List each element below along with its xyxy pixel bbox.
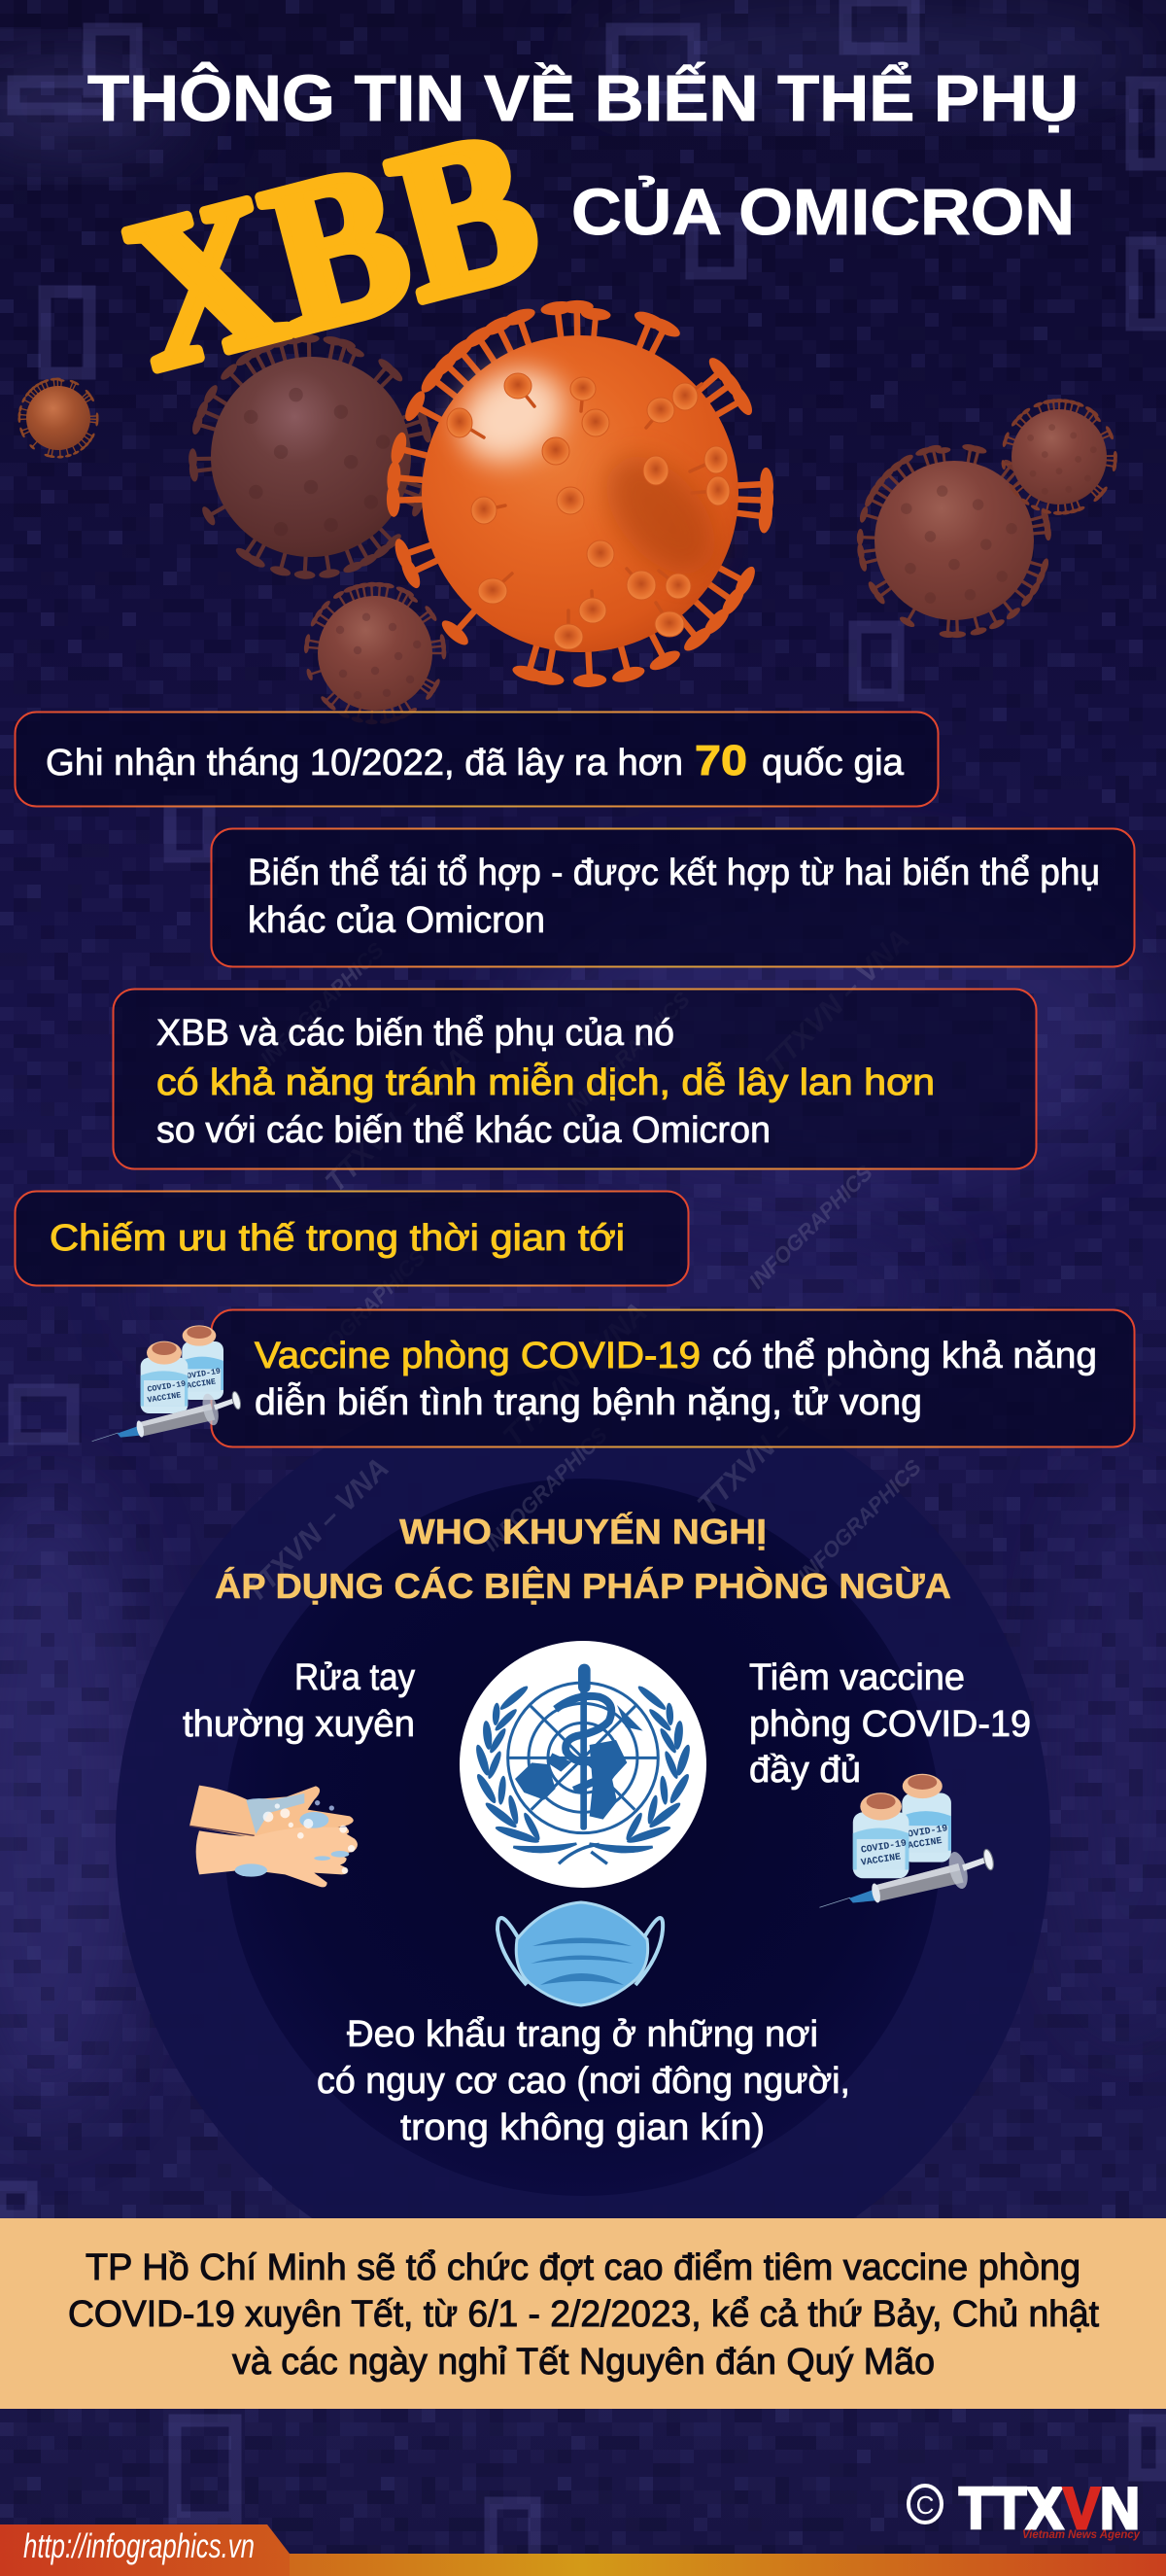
number 70: 70 bbox=[695, 737, 747, 784]
panel: recorded spread: quốc gia bbox=[762, 743, 905, 783]
panel: recombinant variant: Biến thể tái tổ hợp - được kết hợp từ hai biến thể phụ bbox=[248, 853, 1100, 893]
panel: vaccine protection: có thể phòng khả năng bbox=[712, 1336, 1097, 1376]
panel: immune evasion: có khả năng tránh miễn dịch, dễ lây lan hơn bbox=[156, 1062, 935, 1103]
panel: vaccine protection bbox=[212, 1310, 1135, 1446]
title line 1: THÔNG TIN VỀ BIẾN THỂ PHỤ bbox=[87, 62, 1079, 135]
icon: vaccine vials and syringe bbox=[92, 1325, 242, 1442]
icon: vaccine vials and syringe (large) bbox=[819, 1774, 995, 1907]
logo: TTXVN: Vietnam News Agency bbox=[1022, 2527, 1141, 2541]
virus: bottom bbox=[277, 556, 472, 750]
panel: recombinant variant: khác của Omicron bbox=[248, 900, 545, 941]
text: wear a mask: có nguy cơ cao (nơi đông người, bbox=[317, 2061, 850, 2102]
virus: large dim left bbox=[156, 302, 465, 611]
WHO heading: ÁP DỤNG CÁC BIỆN PHÁP PHÒNG NGỪA bbox=[215, 1565, 951, 1606]
watermarks: INFOGRAPHICS bbox=[297, 1244, 430, 1378]
logo: TTXVN: TTXVN bbox=[959, 2476, 1140, 2541]
text: get vaccinated: đầy đủ bbox=[749, 1750, 861, 1791]
panel: vaccine protection: diễn biến tình trạng bệnh nặng, tử vong bbox=[255, 1381, 922, 1423]
icon: face mask bbox=[497, 1902, 663, 2005]
watermarks: TTXVN – VNA bbox=[497, 1297, 654, 1453]
watermarks: INFOGRAPHICS bbox=[479, 1422, 612, 1556]
big concentric circle backdrop bbox=[116, 1370, 1050, 2305]
watermarks bbox=[239, 923, 926, 1609]
watermarks: INFOGRAPHICS bbox=[256, 937, 389, 1071]
icon: washing hands bbox=[189, 1786, 358, 1887]
text: wash hands: thường xuyên bbox=[183, 1704, 415, 1745]
panel: dominant soon: Chiếm ưu thế trong thời gian tới bbox=[50, 1218, 625, 1259]
footer strip bbox=[0, 2554, 1166, 2576]
banner: Ho Chi Minh City campaign: TP Hồ Chí Minh sẽ tổ chức đợt cao điểm tiêm vaccine phòng bbox=[86, 2247, 1080, 2288]
logo: TTXVN: C bbox=[916, 2490, 934, 2520]
watermarks: TTXVN – VNA bbox=[692, 1365, 848, 1521]
watermarks: TTXVN – VNA bbox=[320, 1042, 476, 1199]
banner: Ho Chi Minh City campaign: và các ngày nghỉ Tết Nguyên đán Quý Mão bbox=[232, 2342, 935, 2383]
watermarks: INFOGRAPHICS bbox=[562, 987, 695, 1121]
panel: immune evasion: XBB và các biến thể phụ của nó bbox=[156, 1013, 674, 1054]
watermarks: INFOGRAPHICS bbox=[744, 1160, 877, 1294]
text: wash hands bbox=[183, 1657, 415, 1745]
text: wear a mask: Đeo khẩu trang ở những nơi bbox=[347, 2014, 818, 2055]
panel: dominant soon bbox=[16, 1192, 688, 1285]
watermarks: TTXVN – VNA bbox=[760, 923, 916, 1080]
footer tab with url: http://infographics.vn bbox=[23, 2527, 255, 2565]
virus: main orange bbox=[386, 299, 774, 688]
text: wear a mask: trong không gian kín) bbox=[400, 2107, 765, 2148]
WHO heading bbox=[215, 1512, 951, 1606]
WHO heading: WHO KHUYẾN NGHỊ bbox=[399, 1512, 767, 1551]
panel: recorded spread: Ghi nhận tháng 10/2022, đã lây ra hơn bbox=[46, 743, 683, 783]
icon: WHO emblem bbox=[460, 1641, 706, 1888]
banner: Ho Chi Minh City campaign bbox=[0, 2218, 1166, 2409]
virus: right small bbox=[977, 374, 1142, 540]
panel: vaccine protection: Vaccine phòng COVID-19 bbox=[255, 1336, 701, 1376]
panel: recombinant variant bbox=[212, 828, 1135, 966]
panel: immune evasion bbox=[113, 990, 1036, 1168]
title line 2: CỦA OMICRON bbox=[571, 176, 1075, 249]
text: get vaccinated: Tiêm vaccine bbox=[749, 1657, 965, 1698]
virus: right large bbox=[839, 425, 1070, 656]
text: get vaccinated: phòng COVID-19 bbox=[749, 1704, 1031, 1745]
watermarks: TTXVN – VNA bbox=[239, 1452, 395, 1609]
banner: Ho Chi Minh City campaign: COVID-19 xuyên Tết, từ 6/1 - 2/2/2023, kể cả thứ Bảy, Chủ nhật bbox=[68, 2294, 1099, 2335]
text: wear a mask bbox=[317, 2014, 850, 2148]
watermarks: INFOGRAPHICS bbox=[793, 1454, 926, 1588]
panel: recorded spread bbox=[16, 712, 939, 807]
footer tab with url bbox=[0, 2524, 290, 2576]
panel: immune evasion: so với các biến thể khác của Omicron bbox=[156, 1110, 771, 1151]
text: wash hands: Rửa tay bbox=[294, 1657, 415, 1698]
text: get vaccinated bbox=[749, 1657, 1031, 1791]
title XBB: XBB bbox=[106, 84, 559, 414]
virus: small far left bbox=[17, 377, 99, 459]
